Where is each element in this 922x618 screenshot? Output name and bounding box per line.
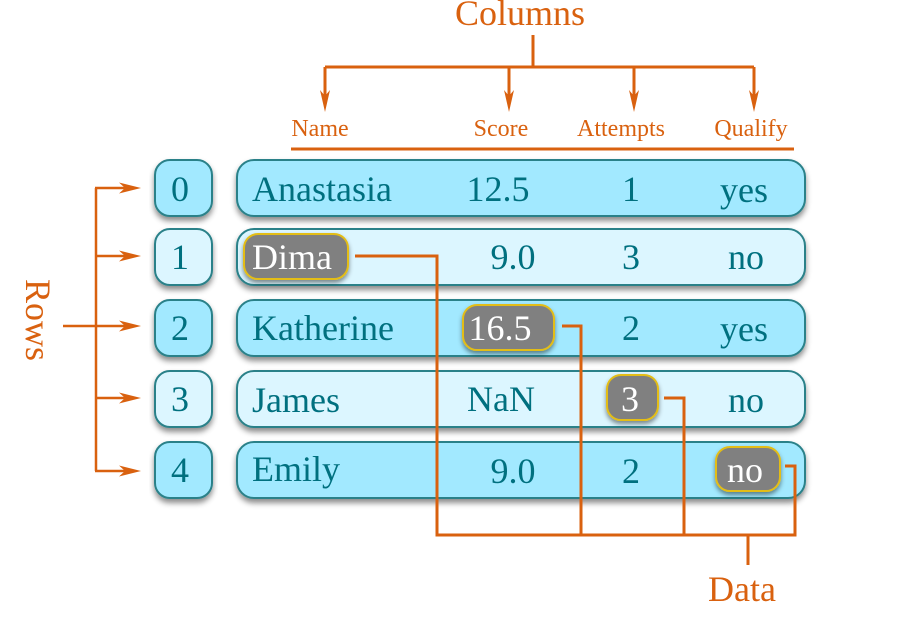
row 1: 9.0 <box>490 237 536 277</box>
row 3: no <box>728 380 764 420</box>
highlight: no <box>716 447 780 491</box>
highlight: no: no <box>727 450 763 490</box>
highlight: Dima: Dima <box>252 237 332 277</box>
header underline <box>291 148 794 150</box>
columns bracket with arrows <box>320 35 759 112</box>
row 4: 4 <box>171 450 189 490</box>
row 2: 2 <box>171 308 189 348</box>
data connector lines <box>355 256 795 565</box>
row 2: yes <box>720 309 768 349</box>
highlight: 16.5 <box>463 305 554 350</box>
rows label: Rows <box>18 279 58 361</box>
row 0: Anastasia <box>252 169 392 209</box>
column headers <box>291 116 788 142</box>
row 2 <box>155 300 805 356</box>
row 0: 0 <box>171 169 189 209</box>
row 0: 12.5 <box>466 169 530 209</box>
row 1: 3 <box>622 237 640 277</box>
row 1 <box>155 229 805 285</box>
row 0 <box>155 160 805 216</box>
row 3: NaN <box>467 379 535 419</box>
data label: Data <box>708 569 776 609</box>
row 4: 2 <box>622 451 640 491</box>
row 0: yes <box>720 170 768 210</box>
highlight: 3: 3 <box>621 379 639 419</box>
row 4: 9.0 <box>490 451 536 491</box>
highlight: 16.5: 16.5 <box>468 308 532 348</box>
row 1: no <box>728 237 764 277</box>
rows bracket with arrows <box>63 182 141 476</box>
highlight: Dima <box>244 234 348 279</box>
highlight: 3 <box>607 375 658 420</box>
column headers: Qualify <box>714 116 788 142</box>
row 1: 1 <box>171 237 189 277</box>
row 3: James <box>252 380 340 420</box>
row 4: Emily <box>252 449 340 489</box>
column headers: Name <box>291 116 349 142</box>
row 3 <box>155 371 805 427</box>
row 4 <box>155 442 805 498</box>
row 2: Katherine <box>252 308 394 348</box>
column headers: Score <box>474 116 528 142</box>
row 0: 1 <box>622 169 640 209</box>
row 2: 2 <box>622 308 640 348</box>
column headers: Attempts <box>577 116 665 142</box>
row 3: 3 <box>171 379 189 419</box>
